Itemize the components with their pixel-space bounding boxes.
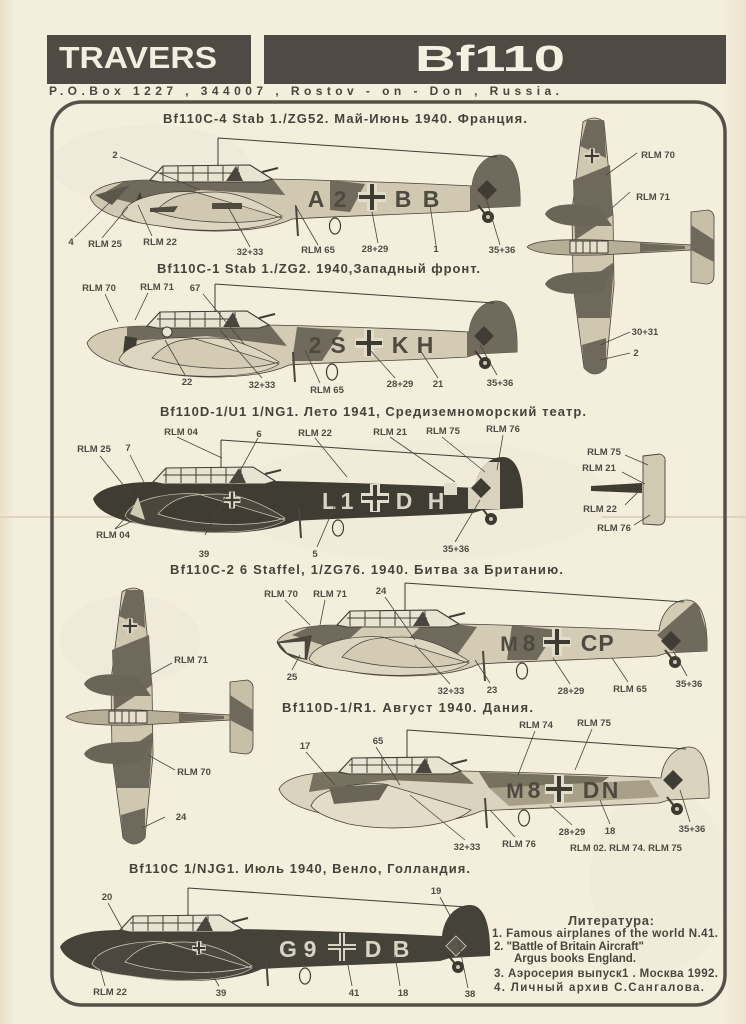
labels: RLM 22: [583, 504, 617, 515]
labels: 41: [349, 988, 360, 999]
aircraft side view: [87, 284, 522, 382]
labels: [300, 718, 705, 854]
aircraft side view: 2: [309, 332, 321, 358]
labels: 24: [176, 812, 187, 823]
labels: [264, 586, 702, 697]
wing marking: [122, 618, 138, 634]
references text block: 2. "Battle of Britain Aircraft": [494, 941, 644, 953]
header: Travers logo bar: TRAVERS: [59, 40, 217, 75]
labels: 32+33: [454, 842, 480, 853]
aircraft side view: H: [428, 488, 444, 514]
heading: Bf110C-1 Stab 1./ZG2. 1940,Западный фронт.: [157, 261, 480, 276]
labels: 22: [182, 377, 192, 388]
header: Travers logo bar: [47, 35, 251, 84]
labels: RLM 76: [597, 523, 631, 534]
panel: top view B: [66, 588, 253, 844]
aircraft side view: D: [583, 777, 599, 803]
labels: RLM 21: [373, 427, 408, 438]
labels: [582, 447, 650, 534]
heading: Bf110D-1/R1. Август 1940. Дания.: [282, 700, 533, 715]
references text block: Argus books England.: [514, 953, 636, 965]
labels: [77, 424, 520, 560]
labels: 35+36: [487, 378, 513, 389]
labels: [142, 655, 211, 828]
labels: RLM 75: [577, 718, 612, 729]
labels: RLM 71: [636, 192, 671, 203]
panel: Bf110C-4: [68, 111, 527, 258]
heading: Bf110C-2 6 Staffel, 1/ZG76. 1940. Битва за Британию.: [170, 562, 563, 577]
labels: 28+29: [362, 244, 388, 255]
header: Bf110 title bar: Bf110: [415, 38, 565, 79]
aircraft side view: B: [395, 186, 411, 212]
labels: RLM 71: [174, 655, 209, 666]
aircraft side view: S: [330, 332, 346, 358]
references text block: 1. Famous airplanes of the world N.41.: [492, 928, 718, 940]
fuselage stub: [591, 483, 642, 493]
aircraft side view: 8: [523, 630, 536, 656]
labels: 32+33: [438, 686, 464, 697]
aircraft side view: G: [279, 936, 297, 962]
labels: 35+36: [679, 824, 705, 835]
aircraft side view: A: [308, 186, 324, 212]
aircraft side view: B: [393, 936, 409, 962]
aircraft side view: H: [417, 332, 433, 358]
labels: 18: [398, 988, 408, 999]
aircraft side view: M: [500, 633, 518, 656]
labels: RLM 25: [77, 444, 112, 455]
labels: 28+29: [558, 686, 584, 697]
labels: [93, 886, 475, 1000]
aircraft side view: 1: [341, 488, 354, 514]
tailplane: [643, 454, 665, 525]
labels: RLM 22: [143, 237, 177, 248]
aircraft side view: K: [392, 332, 409, 358]
labels: 6: [256, 429, 262, 440]
header: Bf110 title bar: [264, 35, 726, 84]
labels: 35+36: [489, 245, 515, 256]
aircraft side view: 9: [304, 936, 316, 962]
labels: RLM 70: [82, 283, 116, 294]
labels: RLM 70: [177, 767, 211, 778]
labels: 2: [112, 150, 118, 161]
panel: top view A: [527, 118, 714, 374]
labels: 28+29: [559, 827, 585, 838]
labels: 21: [433, 379, 444, 390]
labels: RLM 21: [582, 463, 617, 474]
labels: RLM 75: [426, 426, 461, 437]
aircraft side view: B: [423, 186, 439, 212]
panel: Bf110D-1/R1: [279, 700, 709, 854]
labels: 2: [633, 348, 639, 359]
labels: RLM 74: [519, 720, 554, 731]
wing marking: [584, 148, 600, 164]
aircraft side view: P: [598, 630, 614, 656]
labels: 19: [431, 886, 441, 897]
labels: RLM 70: [264, 589, 298, 600]
panel: Bf110D-1/U1: [77, 404, 586, 560]
labels: RLM 71: [140, 282, 175, 293]
labels: 5: [312, 549, 318, 560]
main rounded frame: [52, 102, 725, 1005]
labels: 32+33: [249, 380, 275, 391]
labels: 35+36: [676, 679, 702, 690]
aircraft side view: D: [365, 936, 381, 962]
labels: 32+33: [237, 247, 263, 258]
labels: RLM 04: [164, 427, 199, 438]
heading: Bf110C 1/NJG1. Июль 1940, Венло, Голландия.: [129, 861, 470, 876]
labels: 38: [465, 989, 475, 1000]
labels: RLM 70: [641, 150, 675, 161]
references text block: 3. Аэросерия выпуск1 . Москва 1992.: [494, 968, 718, 980]
references text block: 4. Личный архив С.Сангалова.: [494, 982, 704, 994]
heading: Bf110C-4 Stab 1./ZG52. Май-Июнь 1940. Франция.: [163, 111, 527, 126]
aircraft side view: [93, 440, 523, 538]
panel: Bf110C NJG1: [60, 861, 490, 1000]
labels: RLM 04: [96, 530, 131, 541]
labels: RLM 22: [93, 987, 127, 998]
labels: 39: [199, 549, 209, 560]
aircraft side view: L: [322, 488, 336, 514]
aircraft side view: 2: [334, 186, 346, 212]
references text block: Литература:: [568, 913, 654, 928]
labels: RLM 02. RLM 74. RLM 75: [570, 843, 683, 854]
labels: RLM 25: [88, 239, 123, 250]
address line: P.O.Box 1227 , 344007 , Rostov - on - Don , Russia.: [49, 84, 559, 98]
aircraft side view: [279, 730, 709, 828]
labels: [68, 150, 515, 258]
panel: tail top view: [582, 447, 665, 534]
labels: RLM 22: [298, 428, 332, 439]
labels: 67: [190, 283, 200, 294]
labels: RLM 65: [301, 245, 336, 256]
labels: 24: [376, 586, 387, 597]
labels: 1: [433, 244, 439, 255]
labels: 17: [300, 741, 310, 752]
references text block: [492, 913, 718, 994]
aircraft side view: [60, 888, 490, 986]
labels: 35+36: [443, 544, 469, 555]
labels: 7: [125, 443, 131, 454]
panel: Bf110C-2: [170, 562, 712, 697]
panel: Bf110C-1: [82, 261, 522, 396]
labels: RLM 65: [310, 385, 345, 396]
aircraft side view: D: [396, 488, 412, 514]
aircraft side view: [277, 583, 712, 681]
aircraft side view: 8: [528, 777, 541, 803]
aircraft side view: N: [602, 777, 618, 803]
labels: 65: [373, 736, 384, 747]
labels: 25: [287, 672, 298, 683]
labels: RLM 75: [587, 447, 622, 458]
labels: 30+31: [632, 327, 659, 338]
labels: 23: [487, 685, 497, 696]
labels: RLM 71: [313, 589, 348, 600]
labels: RLM 76: [486, 424, 520, 435]
labels: 18: [605, 826, 615, 837]
aircraft side view: C: [581, 630, 597, 656]
labels: 28+29: [387, 379, 413, 390]
labels: RLM 65: [613, 684, 648, 695]
labels: RLM 76: [502, 839, 536, 850]
heading: Bf110D-1/U1 1/NG1. Лето 1941, Средиземноморский театр.: [160, 404, 586, 419]
labels: 39: [216, 988, 226, 999]
aircraft side view: [90, 138, 525, 236]
labels: [82, 282, 513, 396]
labels: [600, 150, 675, 360]
labels: 4: [68, 237, 74, 248]
labels: 20: [102, 892, 112, 903]
aircraft side view: M: [506, 780, 524, 803]
